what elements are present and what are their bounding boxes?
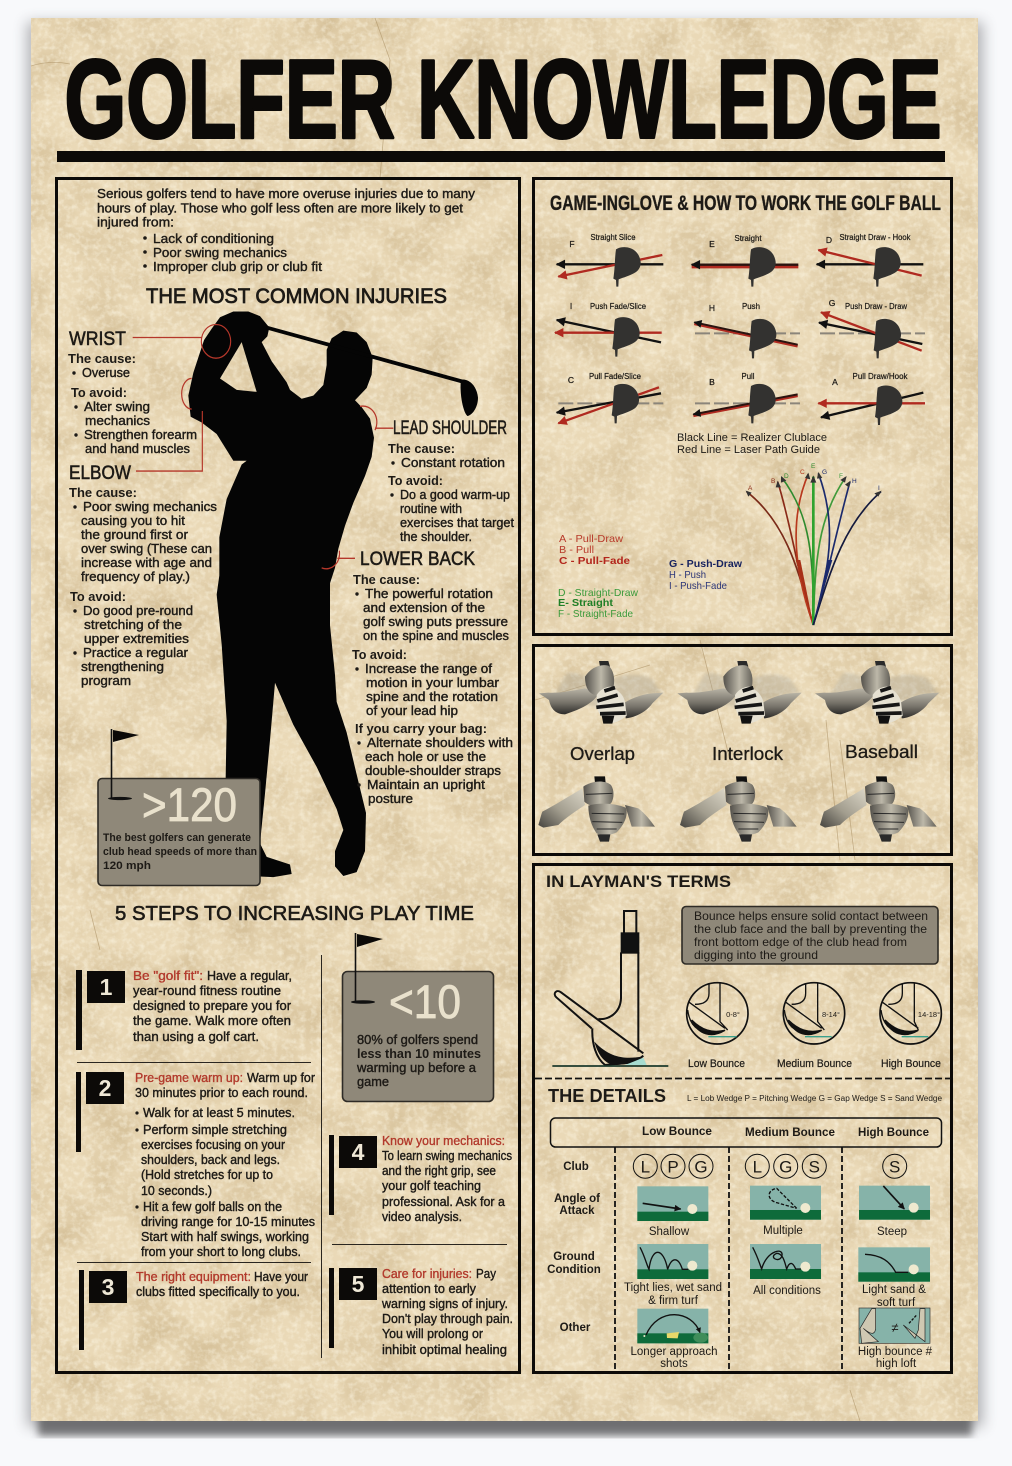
row labels: Attack bbox=[559, 1205, 595, 1217]
bounce definition box: the club face and the ball by preventing the bbox=[694, 922, 927, 936]
legend: straight: F - Straight-Fade bbox=[558, 608, 633, 620]
lower back text: of your lead hip bbox=[366, 704, 458, 718]
step 2: Warm up for bbox=[247, 1071, 315, 1085]
step 4: professional. Ask for a bbox=[382, 1195, 505, 1209]
stat box: under 10 minutes: 80% of golfers spend bbox=[357, 1033, 478, 1047]
row labels: Ground bbox=[553, 1251, 595, 1263]
captions: Tight lies, wet sand bbox=[624, 1282, 722, 1294]
club letter badges: L bbox=[753, 1158, 762, 1176]
wrist text: Overuse bbox=[82, 366, 130, 380]
club diagram labels: Straight Slice bbox=[590, 232, 636, 242]
step 5: warning signs of injury. bbox=[381, 1297, 508, 1311]
captions: Longer approach bbox=[631, 1346, 717, 1358]
bounce definition box: digging into the ground bbox=[694, 948, 818, 962]
step 5: Pay bbox=[476, 1267, 497, 1281]
step 2: Hit a few golf balls on the bbox=[143, 1200, 282, 1214]
grip labels bbox=[570, 742, 918, 764]
club diagram labels: Push Fade/Slice bbox=[590, 301, 646, 311]
club diagram labels: Pull bbox=[742, 371, 755, 381]
club diagram labels: H bbox=[709, 303, 715, 313]
captions: High bounce # bbox=[858, 1346, 933, 1358]
stat box: over 120 mph: >120 bbox=[142, 778, 237, 831]
club diagram labels: Pull Draw/Hook bbox=[852, 371, 908, 381]
lead shoulder text: LEAD SHOULDER bbox=[393, 418, 507, 439]
legend: pull bbox=[559, 533, 630, 567]
step 3: clubs fitted specifically to you. bbox=[136, 1285, 300, 1299]
wrist text: To avoid: bbox=[71, 386, 127, 400]
elbow text: The cause: bbox=[69, 486, 137, 500]
wrist text: WRIST bbox=[69, 329, 126, 350]
row labels: Angle of bbox=[554, 1193, 600, 1205]
elbow text: Practice a regular bbox=[83, 646, 188, 660]
bounce angle and bounce labels bbox=[688, 1010, 941, 1070]
step 4: 4 bbox=[352, 1139, 365, 1165]
lead shoulder text: Constant rotation bbox=[401, 456, 505, 470]
grip labels: Interlock bbox=[712, 744, 784, 764]
elbow text: the ground first or bbox=[81, 528, 188, 542]
lead shoulder text: the shoulder. bbox=[400, 530, 472, 544]
intro text: injured from: bbox=[97, 216, 174, 230]
elbow text: strengthening bbox=[81, 660, 164, 674]
lead shoulder text: To avoid: bbox=[388, 474, 443, 488]
elbow text: program bbox=[81, 674, 131, 688]
wrist text: Strengthen forearm bbox=[84, 428, 197, 442]
wrist text: mechanics bbox=[85, 414, 150, 428]
lower back text: LOWER BACK bbox=[360, 549, 475, 570]
step 4: Know your mechanics: bbox=[382, 1134, 505, 1148]
captions bbox=[624, 1225, 933, 1370]
lead shoulder text: The cause: bbox=[388, 442, 455, 456]
step 2: 2 bbox=[99, 1075, 111, 1101]
stat box: over 120 mph bbox=[98, 729, 260, 886]
bounce definition box bbox=[682, 906, 938, 964]
intro text: Poor swing mechanics bbox=[153, 246, 287, 260]
grip hand illustrations bbox=[538, 661, 939, 842]
lower back text: on the spine and muscles bbox=[363, 629, 509, 643]
club diagram labels: A bbox=[832, 377, 838, 387]
step 2: Walk for at least 5 minutes. bbox=[143, 1106, 295, 1120]
heading: the details: THE DETAILS bbox=[548, 1086, 666, 1106]
flight path letters: H bbox=[852, 478, 857, 485]
step 5 bbox=[329, 1267, 513, 1357]
step 1: Have a regular, bbox=[207, 969, 292, 983]
intro text: Improper club grip or club fit bbox=[153, 260, 323, 274]
step 4 bbox=[329, 1134, 512, 1224]
captions: Multiple bbox=[763, 1225, 803, 1237]
step 1: Be "golf fit": bbox=[133, 969, 203, 983]
details table header: Low Bounce bbox=[642, 1126, 712, 1138]
flight path letters: G bbox=[822, 469, 827, 476]
details table header: Medium Bounce bbox=[745, 1127, 835, 1139]
legend: pull: A - Pull-Draw bbox=[559, 533, 623, 545]
step 1: year-round fitness routine bbox=[133, 984, 281, 998]
step 5: 5 bbox=[352, 1271, 365, 1297]
legend: push: I - Push-Fade bbox=[669, 580, 727, 592]
key: line colours: Black Line = Realizer Clublace bbox=[677, 432, 827, 444]
step 3: Have your bbox=[254, 1270, 308, 1284]
step 2: driving range for 10-15 minutes bbox=[141, 1215, 315, 1229]
flight path letters: A bbox=[748, 485, 753, 492]
captions: & firm turf bbox=[648, 1295, 699, 1307]
step 3: 3 bbox=[102, 1274, 114, 1300]
lead shoulder text bbox=[388, 418, 515, 544]
elbow text: upper extremities bbox=[84, 632, 189, 646]
wrist text: The cause: bbox=[68, 352, 136, 366]
step 1 bbox=[76, 969, 292, 1050]
flight path letters: D bbox=[784, 473, 789, 480]
wrist text: Alter swing bbox=[84, 400, 150, 414]
stat box: under 10 minutes: game bbox=[357, 1075, 389, 1089]
club diagram labels: Push bbox=[742, 301, 760, 311]
captions: high loft bbox=[876, 1358, 917, 1370]
club diagram labels: B bbox=[709, 377, 715, 387]
intro text: Serious golfers tend to have more overuse injuries due to many bbox=[97, 187, 476, 201]
grip labels: Overlap bbox=[570, 744, 635, 764]
elbow text: causing you to hit bbox=[81, 514, 186, 528]
flight path letters: C bbox=[800, 469, 805, 476]
ball flight path chart bbox=[746, 472, 882, 625]
row labels bbox=[547, 1161, 601, 1334]
step 4: your golf teaching bbox=[382, 1179, 481, 1193]
captions: Shallow bbox=[649, 1226, 690, 1238]
title rule bbox=[57, 151, 945, 162]
grip labels: Baseball bbox=[845, 742, 918, 762]
step 2: 30 minutes prior to each round. bbox=[135, 1086, 308, 1100]
panel: grips bbox=[534, 646, 952, 854]
step 4: video analysis. bbox=[382, 1210, 462, 1224]
step 3 bbox=[79, 1270, 308, 1350]
club letter badges: G bbox=[779, 1158, 792, 1176]
row labels: Club bbox=[563, 1161, 589, 1173]
step 5: Don't play through pain. bbox=[382, 1312, 513, 1326]
elbow text bbox=[69, 463, 217, 688]
flight path letters: B bbox=[771, 478, 775, 485]
captions: Steep bbox=[877, 1226, 907, 1238]
legend: pull: B - Pull bbox=[559, 544, 594, 556]
step 2: from your short to long clubs. bbox=[141, 1245, 301, 1259]
lead shoulder text: routine with bbox=[400, 502, 462, 516]
step 1: designed to prepare you for bbox=[133, 999, 291, 1013]
step 2: exercises focusing on your bbox=[141, 1138, 285, 1152]
step 5: Care for injuries: bbox=[382, 1267, 472, 1281]
legend: push bbox=[669, 558, 743, 592]
club diagram labels: I bbox=[570, 301, 572, 311]
legend: straight: E- Straight bbox=[558, 597, 614, 609]
step 1: 1 bbox=[100, 974, 113, 1000]
not equal sign: ≠ bbox=[891, 1320, 899, 1335]
lead shoulder text: exercises that target bbox=[400, 516, 515, 530]
step 2 bbox=[76, 1071, 315, 1259]
elbow text: over swing (These can bbox=[81, 542, 212, 556]
flight path letters: F bbox=[839, 473, 843, 480]
club diagram labels bbox=[568, 232, 911, 387]
club diagram labels: D bbox=[826, 235, 832, 245]
elbow text: ELBOW bbox=[69, 463, 131, 484]
club letter badges: L bbox=[641, 1158, 650, 1176]
elbow text: To avoid: bbox=[70, 590, 126, 604]
club letter badges: S bbox=[889, 1158, 900, 1176]
club letter badges: G bbox=[694, 1158, 708, 1176]
heading: most common injuries: THE MOST COMMON INJURIES bbox=[146, 285, 447, 308]
legend: straight: D - Straight-Draw bbox=[558, 587, 638, 599]
step 4: To learn swing mechanics bbox=[382, 1149, 512, 1163]
club diagram labels: E bbox=[709, 239, 715, 249]
step 2: Start with half swings, working bbox=[141, 1230, 309, 1244]
key: line colours bbox=[677, 432, 827, 456]
panel: how to work the golf ball bbox=[534, 178, 952, 634]
lower back text: Alternate shoulders with bbox=[367, 736, 513, 750]
lower back text: motion in your lumbar bbox=[366, 676, 499, 690]
legend: pull: C - Pull-Fade bbox=[559, 555, 630, 567]
step 2: shoulders, back and legs. bbox=[141, 1153, 280, 1167]
details table header: High Bounce bbox=[858, 1127, 929, 1139]
step 2: Perform simple stretching bbox=[143, 1123, 287, 1137]
stat box: over 120 mph: The best golfers can generate bbox=[103, 832, 251, 844]
injury callout lines bbox=[133, 324, 393, 569]
club letter badges bbox=[633, 1154, 907, 1178]
captions: All conditions bbox=[753, 1285, 821, 1297]
step 2: 10 seconds.) bbox=[141, 1184, 212, 1198]
club diagram labels: Straight bbox=[734, 233, 762, 243]
captions: soft turf bbox=[877, 1297, 916, 1309]
flight path letters bbox=[748, 463, 880, 492]
row labels: Condition bbox=[547, 1264, 601, 1276]
panel: injuries and steps bbox=[56, 178, 520, 1372]
club diagram labels: Straight Draw - Hook bbox=[840, 232, 911, 242]
bounce definition box: Bounce helps ensure solid contact between bbox=[694, 909, 928, 923]
lead shoulder text: Do a good warm-up bbox=[400, 488, 510, 502]
elbow text: increase with age and bbox=[81, 556, 212, 570]
ball flight club diagrams bbox=[555, 247, 925, 425]
bounce angle diagrams bbox=[687, 983, 941, 1044]
step 1: than using a golf cart. bbox=[133, 1030, 259, 1044]
intro text: hours of play. Those who golf less often are more likely to get bbox=[97, 202, 464, 216]
elbow text: frequency of play.) bbox=[81, 570, 190, 584]
lower back text: spine and the rotation bbox=[366, 690, 498, 704]
lower back text: Maintain an upright bbox=[367, 778, 486, 792]
elbow text: Poor swing mechanics bbox=[83, 500, 217, 514]
lower back text: golf swing puts pressure bbox=[363, 615, 508, 629]
lower back text: each hole or use the bbox=[365, 750, 486, 764]
club diagram labels: Push Draw - Draw bbox=[845, 301, 908, 311]
bounce definition box: front bottom edge of the club head from bbox=[694, 935, 907, 949]
wrist text: and hand muscles bbox=[85, 442, 190, 456]
step 4: and the right grip, see bbox=[382, 1164, 496, 1178]
club letter badges: P bbox=[667, 1158, 679, 1176]
flight path letters: I bbox=[878, 485, 880, 492]
captions: shots bbox=[660, 1358, 688, 1370]
wedge illustration bbox=[552, 911, 668, 1066]
heading: 5 steps: 5 STEPS TO INCREASING PLAY TIME bbox=[115, 903, 474, 925]
elbow text: Do good pre-round bbox=[83, 604, 193, 618]
lower back text: and extension of the bbox=[363, 601, 485, 615]
stat box: under 10 minutes: less than 10 minutes bbox=[357, 1047, 481, 1061]
club letter badges: S bbox=[809, 1158, 820, 1176]
lower back text: The cause: bbox=[353, 573, 420, 587]
lower back text: double-shoulder straps bbox=[365, 764, 501, 778]
stat box: under 10 minutes: <10 bbox=[389, 975, 461, 1028]
legend: push: G - Push-Draw bbox=[669, 558, 743, 570]
bounce angle and bounce labels: 8-14° bbox=[822, 1010, 840, 1019]
step 2: Pre-game warm up: bbox=[135, 1071, 243, 1085]
lower back text: To avoid: bbox=[352, 648, 407, 662]
club diagram labels: G bbox=[829, 298, 835, 308]
stat box: over 120 mph: 120 mph bbox=[103, 860, 151, 872]
key: line colours: Red Line = Laser Path Guide bbox=[677, 444, 820, 456]
lower back text: If you carry your bag: bbox=[355, 722, 487, 736]
wedge legend: L = Lob Wedge P = Pitching Wedge G = Gap Wedge S = Sand Wedge bbox=[687, 1094, 943, 1103]
lower back text: posture bbox=[368, 792, 413, 806]
lower back text bbox=[352, 549, 513, 806]
technique illustrations bbox=[637, 1186, 930, 1343]
golfer silhouette bbox=[188, 311, 478, 877]
panel: layman's terms and details bbox=[534, 864, 952, 1372]
step 5: attention to early bbox=[382, 1282, 477, 1296]
bounce angle and bounce labels: High Bounce bbox=[881, 1058, 941, 1070]
intro text: Lack of conditioning bbox=[153, 232, 274, 246]
bounce angle and bounce labels: 0-8° bbox=[726, 1010, 740, 1019]
bounce angle and bounce labels: Low Bounce bbox=[688, 1058, 745, 1070]
legend: straight bbox=[558, 587, 638, 620]
stat box: under 10 minutes bbox=[342, 933, 494, 1102]
step 5: You will prolong or bbox=[382, 1327, 483, 1341]
wrist text bbox=[68, 329, 197, 456]
legend: push: H - Push bbox=[669, 569, 706, 581]
club diagram labels: F bbox=[569, 239, 575, 249]
details table header bbox=[550, 1118, 942, 1147]
flight path letters: E bbox=[811, 463, 816, 470]
step 2: (Hold stretches for up to bbox=[141, 1168, 273, 1182]
heading: in layman's terms: IN LAYMAN'S TERMS bbox=[546, 872, 731, 891]
club diagram labels: C bbox=[568, 375, 574, 385]
step 5: inhibit optimal healing bbox=[382, 1343, 507, 1357]
row labels: Other bbox=[560, 1322, 591, 1334]
bounce angle and bounce labels: Medium Bounce bbox=[777, 1058, 852, 1070]
step 1: the game. Walk more often bbox=[133, 1014, 291, 1028]
elbow text: stretching of the bbox=[84, 618, 182, 632]
club diagram labels: Pull Fade/Slice bbox=[589, 371, 641, 381]
stat box: under 10 minutes: warming up before a bbox=[356, 1061, 476, 1075]
stat box: over 120 mph: club head speeds of more than bbox=[103, 846, 257, 858]
bounce angle and bounce labels: 14-18° bbox=[918, 1010, 940, 1019]
intro text bbox=[97, 187, 476, 274]
lower back text: Increase the range of bbox=[365, 662, 493, 676]
lower back text: The powerful rotation bbox=[365, 587, 493, 601]
captions: Light sand & bbox=[862, 1284, 926, 1296]
step 3: The right equipment: bbox=[136, 1270, 251, 1284]
